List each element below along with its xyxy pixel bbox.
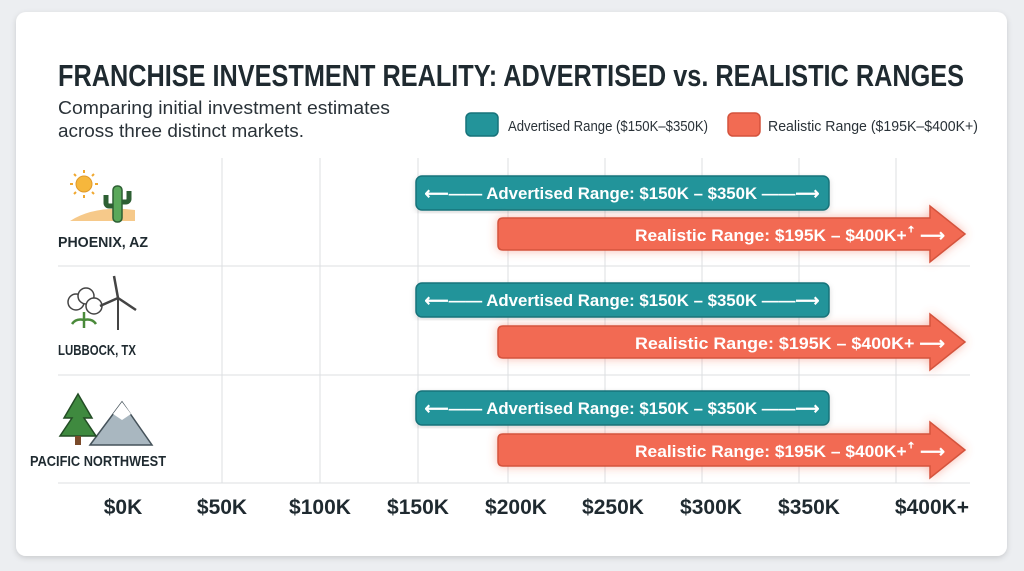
row bars: lubbock [416, 283, 965, 370]
x axis labels: $200K [485, 496, 547, 519]
icon: cotton and wind turbine [68, 276, 136, 330]
row bars: pacific northwest: Realistic Range: $195K – $400K+ꜛ ⟶ [635, 441, 945, 461]
x axis labels: $250K [582, 496, 644, 519]
x axis labels: $50K [197, 496, 247, 519]
icon: trees and mountains [60, 394, 152, 445]
row bars: phoenix: Realistic Range: $195K – $400K+ꜛ ⟶ [635, 225, 945, 245]
row bars: phoenix [416, 176, 965, 262]
icon: phoenix sun and cactus [70, 170, 135, 222]
x axis labels: $100K [289, 496, 351, 519]
subtitle [58, 98, 390, 141]
legend [466, 113, 978, 136]
x axis labels: $0K [104, 496, 142, 519]
x axis labels: $150K [387, 496, 449, 519]
label: lubbock: LUBBOCK, TX [58, 342, 136, 359]
legend: Advertised Range ($150K–$350K) [508, 118, 708, 135]
label: pacific northwest: PACIFIC NORTHWEST [30, 453, 166, 470]
x axis labels: $350K [778, 496, 840, 519]
row bars: phoenix: ⟵—— Advertised Range: $150K – $350K ——⟶ [424, 184, 820, 203]
row bars: pacific northwest [416, 391, 965, 478]
x axis labels: $400K+ [895, 496, 969, 519]
row bars: lubbock: ⟵—— Advertised Range: $150K – $350K ——⟶ [424, 291, 820, 310]
row bars: pacific northwest: ⟵—— Advertised Range: $150K – $350K ——⟶ [424, 399, 820, 418]
row bars: lubbock: Realistic Range: $195K – $400K+ ⟶ [635, 334, 945, 353]
x axis labels: $300K [680, 496, 742, 519]
legend: Realistic Range ($195K–$400K+) [768, 118, 978, 135]
label: phoenix: PHOENIX, AZ [58, 234, 148, 251]
x axis labels [104, 496, 969, 519]
subtitle: across three distinct markets. [58, 121, 304, 141]
subtitle: Comparing initial investment estimates [58, 98, 390, 118]
